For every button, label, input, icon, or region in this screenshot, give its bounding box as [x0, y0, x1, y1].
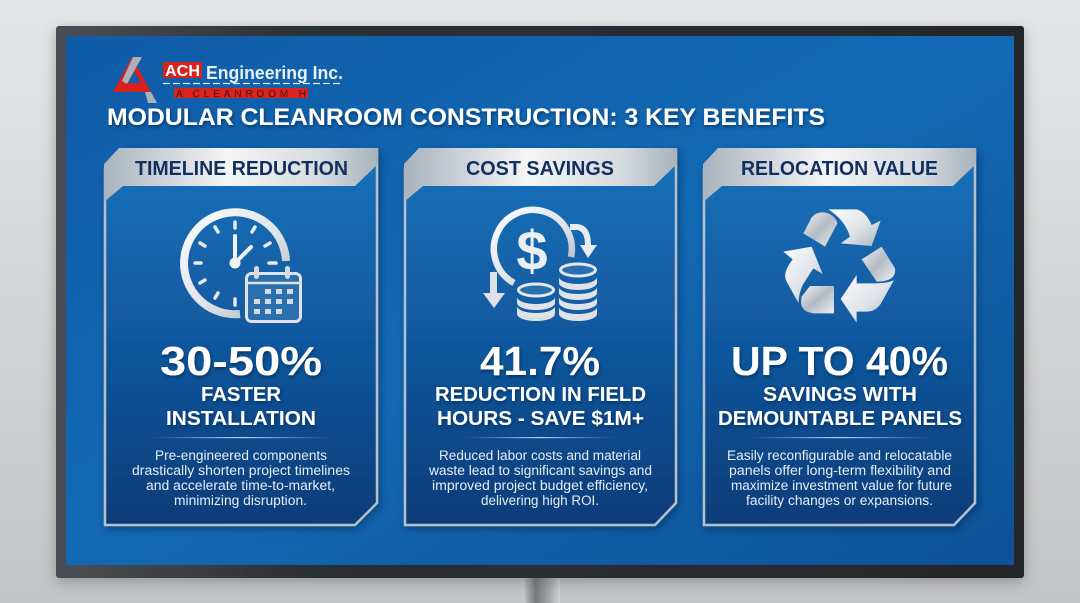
description: and accelerate time-to-market, — [146, 478, 335, 493]
subheading — [166, 383, 316, 430]
title: MODULAR CLEANROOM CONSTRUCTION: 3 KEY BENEFITS — [107, 104, 825, 131]
panel: timeline reduction — [104, 148, 378, 525]
screen background — [66, 36, 1014, 565]
icon: clock and calendar — [184, 212, 300, 322]
description: facility changes or expansions. — [746, 493, 933, 508]
description: minimizing disruption. — [174, 493, 307, 508]
header banner — [703, 148, 976, 202]
stat: up to 40%: UP TO 40% — [731, 338, 948, 384]
subheading: INSTALLATION — [166, 407, 316, 430]
subheading — [718, 383, 962, 430]
subheading: HOURS - SAVE $1M+ — [437, 407, 644, 430]
stat: 41.7%: 41.7% — [480, 338, 600, 384]
description: panels offer long-term flexibility and — [729, 463, 951, 478]
header banner — [404, 148, 677, 202]
panel: relocation value — [703, 148, 976, 525]
subheading: FASTER — [201, 383, 281, 406]
subheading: SAVINGS WITH — [763, 383, 917, 406]
description: maximize investment value for future — [731, 478, 952, 493]
subheading: DEMOUNTABLE PANELS — [718, 407, 962, 430]
logo: ACH Engineering Inc.: A CLEANROOM H — [176, 89, 306, 100]
description: Reduced labor costs and material — [439, 448, 641, 463]
description: Easily reconfigurable and relocatable — [727, 448, 952, 463]
subheading: REDUCTION IN FIELD — [435, 383, 646, 406]
logo: ACH Engineering Inc. — [113, 57, 343, 103]
subheading — [435, 383, 646, 430]
description: delivering high ROI. — [481, 493, 599, 508]
description: improved project budget efficiency, — [432, 478, 648, 493]
icon: dollar, coins and arrows: $ — [516, 219, 548, 282]
description: Pre-engineered components — [155, 448, 327, 463]
stat: 30-50%: 30-50% — [160, 338, 322, 384]
monitor stand — [525, 575, 560, 603]
description: waste lead to significant savings and — [428, 463, 652, 478]
logo: ACH Engineering Inc.: Engineering Inc. — [206, 63, 343, 83]
icon: dollar, coins and arrows — [483, 210, 597, 321]
icon: recycle arrows — [783, 209, 895, 323]
description — [727, 448, 952, 508]
header banner: COST SAVINGS — [466, 158, 614, 180]
header banner — [104, 148, 378, 202]
header banner: RELOCATION VALUE — [741, 158, 938, 180]
description — [132, 448, 350, 508]
panel: cost savings — [404, 148, 677, 525]
logo: ACH Engineering Inc.: ACH — [165, 63, 200, 80]
description: drastically shorten project timelines — [132, 463, 350, 478]
description — [428, 448, 652, 508]
header banner: TIMELINE REDUCTION — [135, 158, 348, 180]
